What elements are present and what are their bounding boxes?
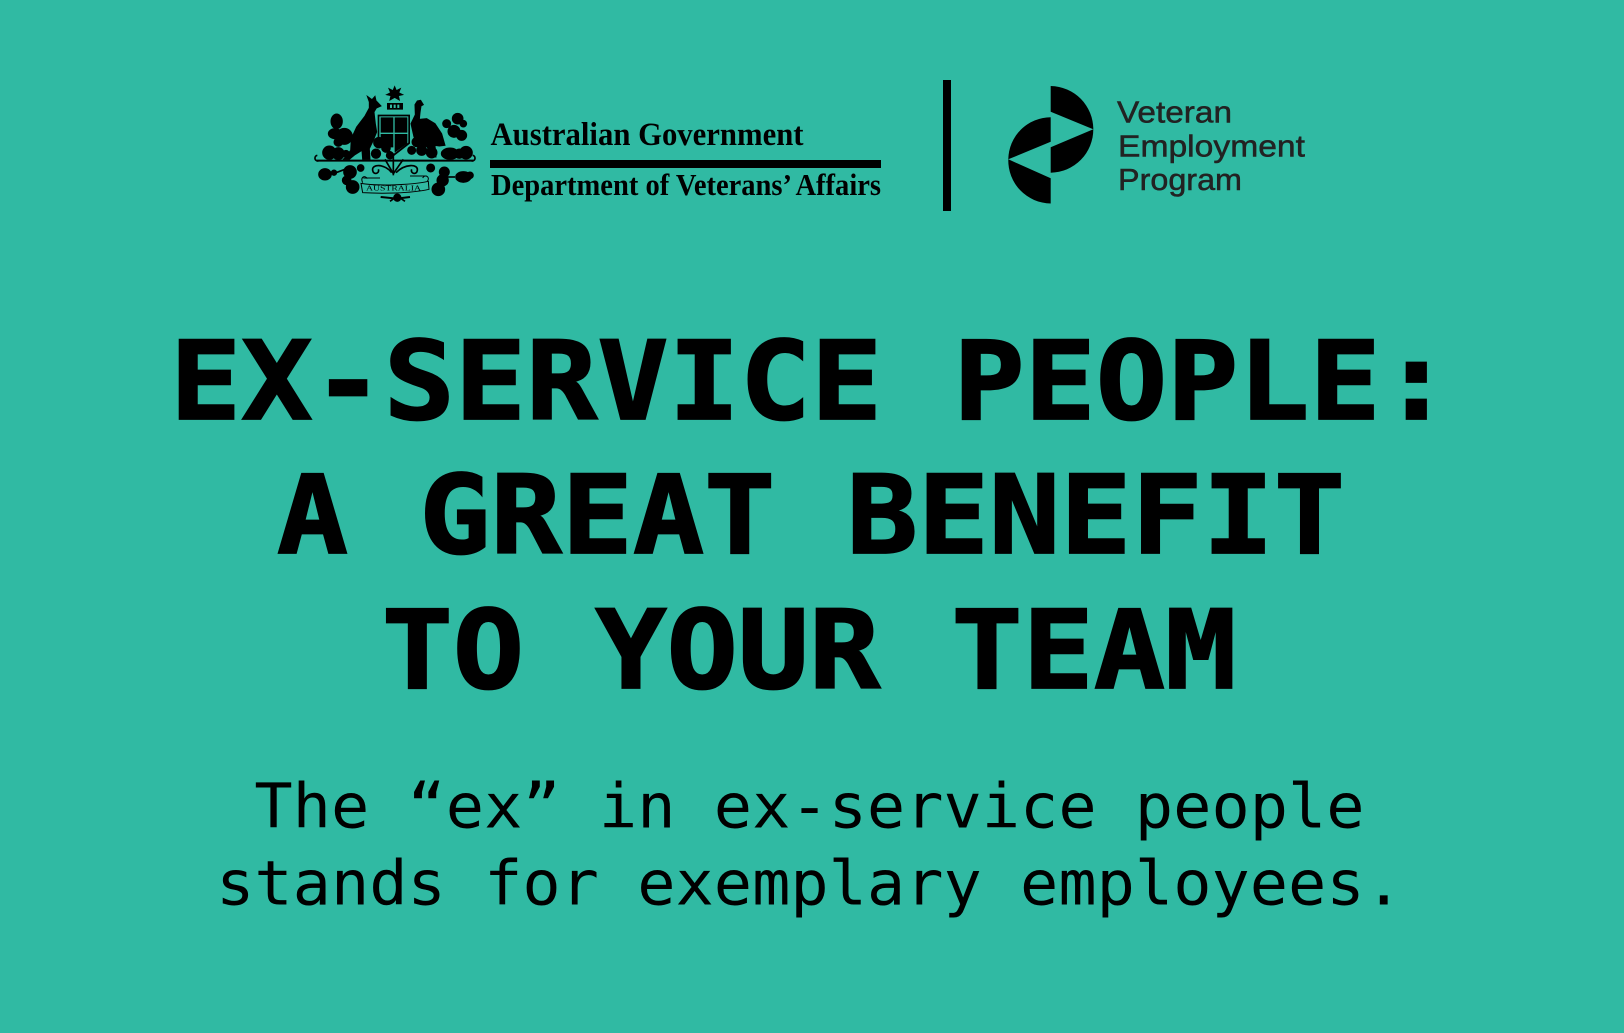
subtitle <box>216 771 1403 919</box>
logo text: Australian Government: Australian Government <box>490 117 804 153</box>
logo text: Veteran Employment Program <box>1117 95 1305 197</box>
title <box>170 318 1452 714</box>
icon: Veteran Employment Program mark <box>1008 86 1093 204</box>
title: A GREAT BENEFIT <box>277 452 1345 579</box>
logo text: Veteran Employment Program: Employment <box>1118 129 1305 164</box>
vertical separator between logos <box>943 80 951 211</box>
logo text: Veteran Employment Program: Program <box>1118 162 1242 197</box>
title: TO YOUR TEAM <box>382 587 1236 714</box>
logo: Australian Government crest <box>315 87 475 201</box>
logo: Australian Government crest: AUSTRALIA <box>366 184 422 193</box>
logo text: Department of Veterans' Affairs: Department of Veterans’ Affairs <box>491 167 881 202</box>
subtitle: stands for exemplary employees. <box>216 847 1403 919</box>
divider rule in government logo <box>490 160 881 168</box>
logo text: Veteran Employment Program: Veteran <box>1117 95 1232 130</box>
title: EX-SERVICE PEOPLE: <box>170 318 1452 445</box>
subtitle: The “ex” in ex-service people <box>254 771 1365 842</box>
